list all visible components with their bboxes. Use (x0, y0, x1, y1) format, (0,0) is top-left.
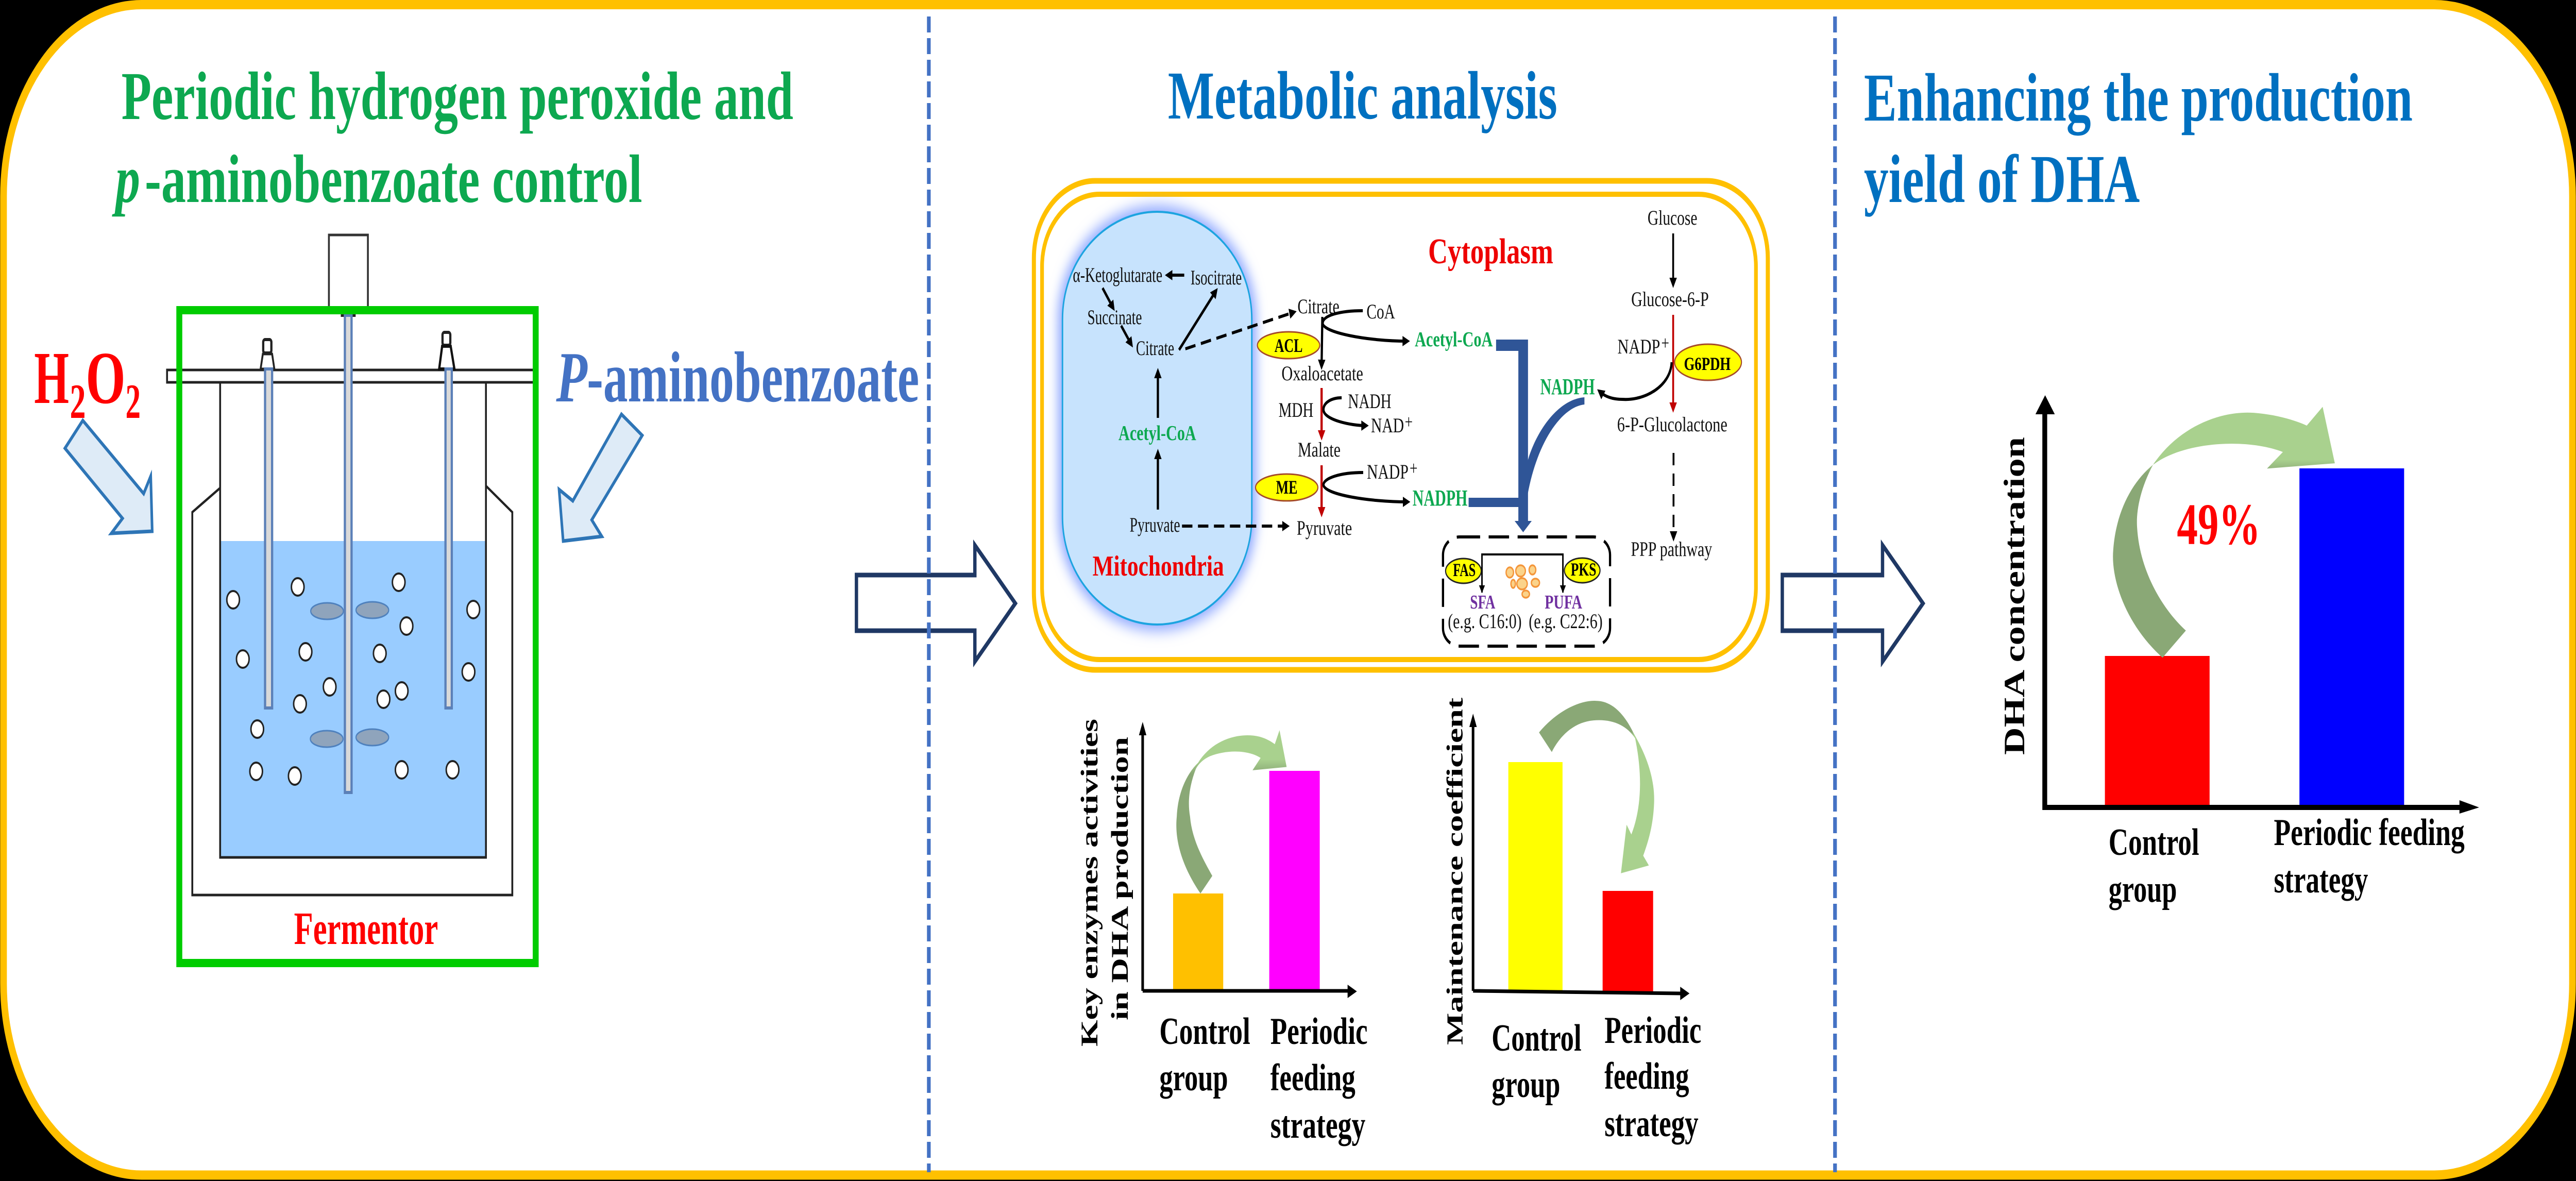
fermentor label: Fermentor (294, 903, 438, 954)
divider left (926, 16, 931, 1172)
category labels: feeding (1270, 1057, 1355, 1099)
pentose phosphate pathway: NADPH (1540, 375, 1595, 399)
mitochondrion (1058, 206, 1256, 631)
enzyme: ACL: ACL (1275, 335, 1302, 356)
arrow: H2O2 feed (65, 420, 152, 533)
axes (1143, 732, 1349, 991)
green border (179, 310, 536, 963)
title: right panel: Enhancing the production (1864, 60, 2413, 136)
pentose phosphate pathway: Glucose (1648, 206, 1697, 229)
title: left panel: -aminobenzoate control (145, 142, 642, 217)
vessel jacket (192, 486, 512, 895)
dashed transport arrows (1182, 312, 1294, 526)
H2O2 label: 2 (126, 374, 141, 429)
y axis label (1076, 719, 1133, 1047)
flow arrow: fermentor to metabolic analysis (856, 545, 1015, 662)
category labels: Periodic (1604, 1009, 1701, 1051)
pentose phosphate pathway: Glucose-6-P (1631, 288, 1709, 311)
enzyme: PKS (1564, 558, 1600, 583)
bar: control (1173, 893, 1223, 989)
pentose phosphate pathway (1540, 206, 1727, 561)
P-aminobenzoate label: -aminobenzoate (587, 338, 919, 417)
culture liquid (220, 541, 486, 857)
category labels: Periodic feeding (2274, 812, 2465, 853)
pentose phosphate pathway: + (1662, 332, 1669, 354)
panel: cell pathway diagram (1034, 181, 1768, 670)
citrate to oxaloacetate (1281, 295, 1493, 385)
MDH step: Malate (1298, 438, 1341, 461)
cell outer membrane (1034, 181, 1768, 670)
bar: periodic feeding (2299, 468, 2404, 806)
y axis label: Maintenance coefficient (1442, 698, 1467, 1045)
pentose phosphate pathway: NADP (1618, 335, 1660, 358)
ME step: Pyruvate (1297, 516, 1352, 539)
enzyme: PKS: PKS (1571, 559, 1596, 580)
citrate to oxaloacetate: Oxaloacetate (1281, 362, 1363, 385)
category labels (2109, 812, 2465, 910)
MDH step: NADH (1348, 390, 1392, 413)
bar: control (1509, 762, 1563, 990)
bubbles (227, 573, 480, 785)
P-aminobenzoate label: P (556, 338, 588, 417)
cytoplasm label: Cytoplasm (1428, 232, 1553, 272)
central shaft (341, 314, 355, 792)
y axis (2036, 395, 2055, 810)
category labels: group (2109, 868, 2177, 910)
pentose phosphate pathway: PPP pathway (1631, 537, 1713, 561)
category labels (1159, 1010, 1368, 1146)
category labels (1492, 1009, 1701, 1144)
bar: periodic feeding (1603, 891, 1653, 992)
bar: periodic feeding (1269, 771, 1320, 989)
MDH step: + (1405, 411, 1413, 433)
left probe (261, 340, 274, 708)
category labels: strategy (1604, 1103, 1699, 1144)
y axis label: DHA concentration (1998, 437, 2031, 755)
mitochondrial arrows (1103, 275, 1216, 510)
enzyme: ME (1256, 474, 1318, 501)
impellers (310, 602, 388, 747)
fatty acid synthesis box: SFA (1470, 592, 1496, 613)
category labels: feeding (1604, 1055, 1689, 1097)
curved increase arrow (1176, 730, 1286, 893)
lid plate (167, 370, 535, 382)
mitochondrion: α-Ketoglutarate (1073, 263, 1162, 286)
bar: control (2105, 656, 2210, 806)
category labels: group (1492, 1064, 1561, 1105)
ME step: NADPH (1413, 486, 1468, 511)
y axis label: in DHA production (1107, 737, 1133, 1020)
MDH step (1279, 388, 1413, 461)
mitochondrion: Pyruvate (1130, 513, 1180, 536)
panel: fermentor (167, 235, 536, 963)
title: middle panel: Metabolic analysis (1168, 58, 1557, 134)
category labels: Control (1492, 1017, 1582, 1059)
enzyme: ME: ME (1276, 477, 1297, 498)
citrate to oxaloacetate: Acetyl-CoA (1415, 327, 1493, 351)
cell inner membrane (1042, 194, 1756, 660)
category labels: Control (2109, 821, 2199, 863)
ME step: NADP (1367, 460, 1409, 483)
MDH step: NAD (1371, 414, 1404, 437)
arrow: p-aminobenzoate feed (559, 414, 642, 541)
title: left panel (112, 59, 793, 217)
enzyme: FAS (1446, 559, 1481, 583)
title: left panel: Periodic hydrogen peroxide and (122, 59, 793, 134)
title: left panel: p (112, 142, 140, 217)
H2O2 label: O (86, 336, 126, 419)
curved increase arrow (2113, 407, 2335, 657)
blue connector to fatty acids (1469, 340, 1584, 532)
title: right panel: yield of DHA (1864, 142, 2140, 217)
vessel wall (220, 383, 486, 857)
enzyme: G6PDH: G6PDH (1684, 353, 1731, 374)
ME step (1297, 458, 1468, 539)
mitochondrion: Isocitrate (1191, 266, 1242, 289)
mitochondrion: Acetyl-CoA (1118, 421, 1196, 445)
enzyme: FAS: FAS (1453, 560, 1476, 580)
y axis label: Key enzymes activities (1076, 719, 1103, 1047)
chart: maintenance coefficient (1442, 698, 1701, 1144)
axes (1473, 724, 1682, 993)
chart: key enzymes activities (1076, 719, 1368, 1146)
fatty acid synthesis box: (e.g. C22:6) (1529, 610, 1603, 633)
fatty acid synthesis box: PUFA (1545, 592, 1582, 613)
category labels: group (1159, 1057, 1228, 1099)
fatty acid synthesis box: (e.g. C16:0) (1448, 610, 1522, 633)
MDH step: MDH (1279, 398, 1313, 421)
curved decrease arrow (1539, 701, 1654, 873)
citrate to oxaloacetate: CoA (1366, 300, 1395, 323)
x axis (2043, 800, 2479, 814)
citrate to oxaloacetate: Citrate (1297, 295, 1340, 318)
pentose phosphate pathway: 6-P-Glucolactone (1617, 413, 1727, 436)
divider right (1833, 16, 1838, 1172)
H2O2 label (34, 336, 141, 429)
title: right panel (1864, 60, 2413, 217)
category labels: Periodic (1270, 1010, 1368, 1052)
H2O2 label: 2 (70, 374, 86, 429)
category labels: Control (1159, 1010, 1250, 1052)
mitochondrion: Mitochondria (1093, 550, 1224, 582)
right probe (439, 332, 454, 708)
category labels: strategy (2274, 859, 2368, 901)
ME step: + (1410, 458, 1417, 479)
mitochondrion: Succinate (1088, 306, 1142, 329)
fatty acid synthesis box (1443, 537, 1610, 646)
enzyme: G6PDH (1674, 344, 1741, 380)
chart: DHA concentration (1998, 395, 2479, 910)
H2O2 label: H (34, 336, 69, 419)
lipid droplets (1506, 565, 1539, 598)
increase percentage: 49% (2177, 492, 2261, 557)
mitochondrion: Citrate (1136, 336, 1174, 360)
motor box (329, 235, 368, 308)
flow arrow: metabolic analysis to yield (1782, 545, 1923, 662)
category labels: strategy (1270, 1104, 1365, 1146)
enzyme: ACL (1258, 332, 1320, 359)
